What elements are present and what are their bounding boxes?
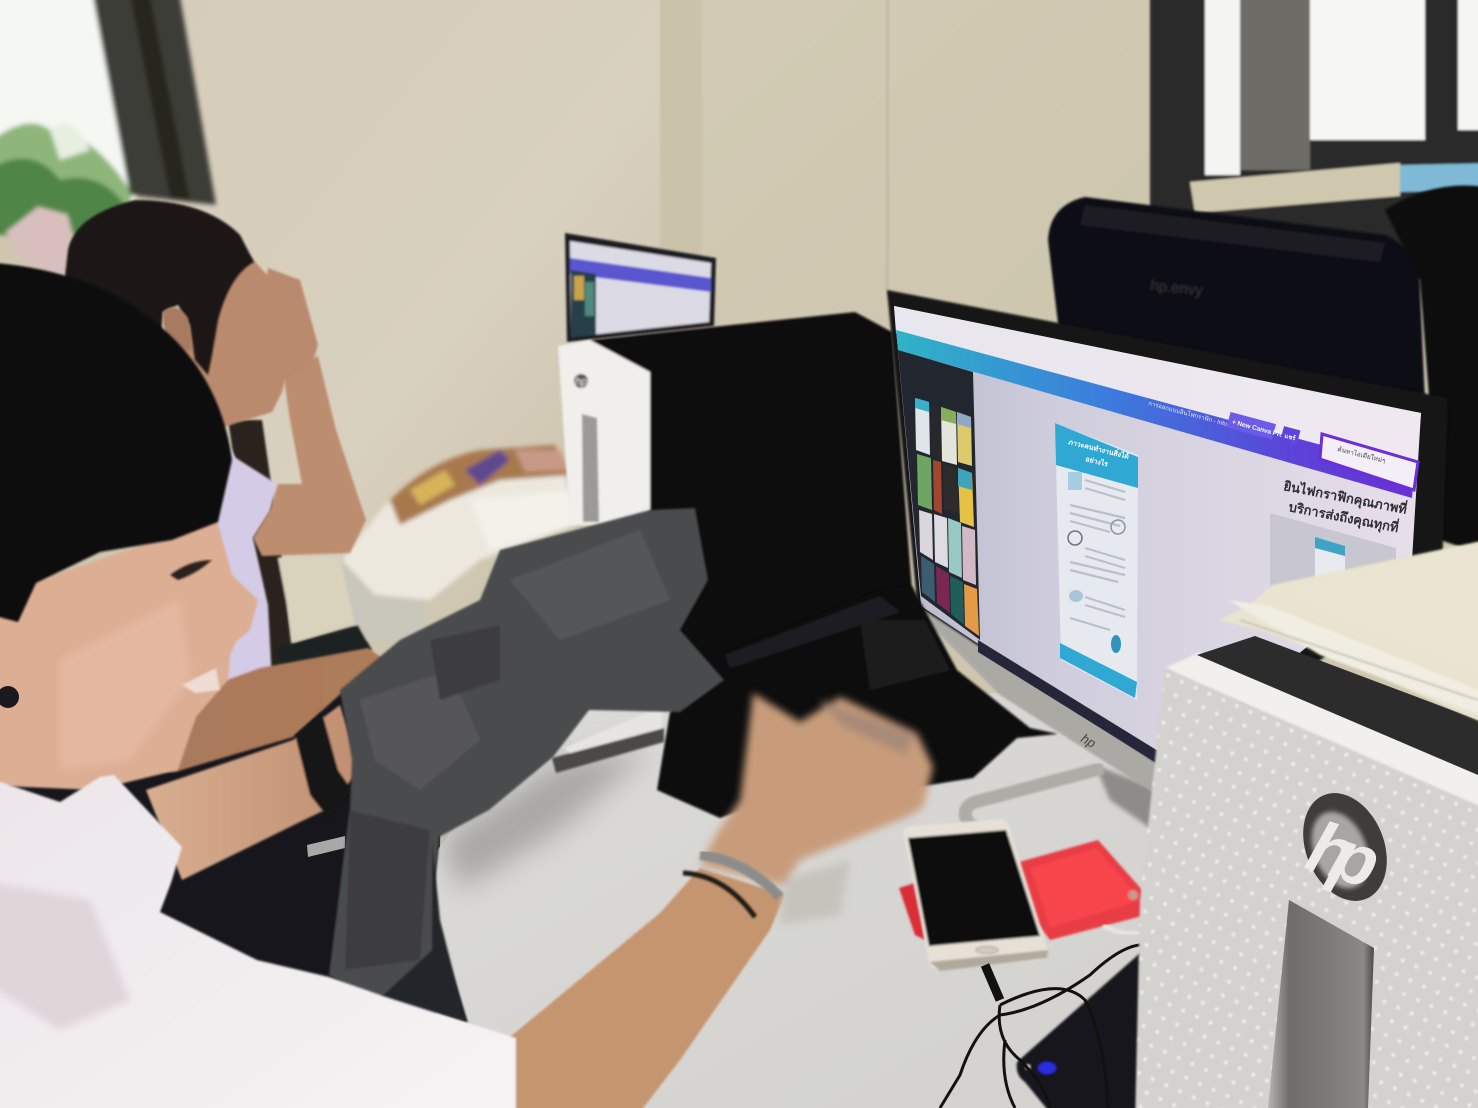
taskbar	[978, 640, 1163, 767]
side ad picture	[1270, 513, 1396, 600]
desk back edge	[552, 706, 664, 773]
back person: ear	[163, 307, 192, 352]
window: right with dark frame	[1150, 0, 1478, 260]
front student: shirt	[0, 775, 516, 1108]
notification box	[1320, 434, 1418, 490]
front student: earring	[0, 686, 19, 708]
page header	[1055, 423, 1138, 488]
page subheading: อย่างไร	[1085, 454, 1109, 469]
screen canvas	[894, 306, 1421, 766]
front student: smile	[182, 668, 220, 693]
front student: hair	[0, 262, 232, 622]
back person: hair	[60, 200, 254, 375]
page icons	[1068, 472, 1125, 653]
back person: arm	[253, 356, 366, 556]
hp badge: hp	[1298, 806, 1389, 904]
red phone case	[899, 840, 1151, 940]
background: left wall	[150, 0, 670, 640]
share button	[1280, 426, 1300, 446]
blue LED display	[1038, 1062, 1056, 1074]
power bank	[1017, 947, 1147, 1108]
page content lines	[1070, 480, 1125, 630]
shirt fold	[0, 880, 130, 1030]
black wristband	[295, 712, 352, 818]
white tower in foreground	[1135, 636, 1478, 1108]
front student's arm	[510, 868, 785, 1108]
black bag on desk	[657, 586, 1058, 818]
monitor stand neck shadow	[1095, 765, 1160, 835]
blurred waving hand	[700, 693, 933, 925]
smartphone	[903, 819, 1048, 971]
left tool strip and templates panel	[898, 350, 980, 640]
New Canva Pro button	[1226, 412, 1286, 442]
black cables	[940, 945, 1147, 1108]
hp badge	[1288, 780, 1402, 914]
tote bag	[342, 445, 575, 600]
tower front perforated panel	[1135, 668, 1478, 1108]
back person: shirt	[170, 440, 277, 700]
office chair	[1048, 186, 1478, 560]
white cable loop	[1103, 925, 1148, 934]
desk surface	[430, 680, 1165, 1108]
silver pen on lap	[307, 836, 345, 857]
back student's forearm	[140, 648, 385, 772]
back person: hair scrunchie	[5, 206, 76, 276]
side ad heading line 2: บริการส่งถึงคุณทุกที่	[1287, 497, 1400, 536]
person at back: lilac shirt and raised arm	[5, 200, 366, 700]
share button: แชร์	[1284, 432, 1297, 443]
front student's forearm with wristband	[146, 705, 360, 880]
template thumbnails	[915, 398, 979, 636]
infographic page being edited	[1055, 423, 1138, 700]
back monitor	[565, 233, 716, 342]
New Canva Pro button: + New Canva Pro	[1231, 419, 1284, 439]
silver slot	[1268, 900, 1374, 1108]
grey jacket	[329, 508, 724, 1022]
window: left with greenery	[0, 0, 216, 235]
back desk with keyboard	[228, 420, 430, 690]
tower top rim	[1165, 652, 1478, 825]
page footer	[1060, 643, 1137, 698]
browser and Canva screen	[894, 306, 1421, 767]
Canva header band	[896, 330, 1414, 498]
background: right wall	[660, 0, 1160, 420]
monitor chin	[918, 606, 1164, 798]
browser chrome	[894, 306, 1421, 474]
document title: การออกแบบอินโฟกราฟิก - Infographic	[1147, 399, 1247, 433]
page sheet	[1055, 423, 1138, 700]
notification text: ค้นหาไอเดียใหม่ๆ	[1337, 445, 1386, 465]
desk shadow under jacket	[440, 750, 650, 890]
office chair: hp.envy	[1150, 277, 1204, 300]
back person: face and hand	[165, 256, 318, 430]
stack of paper	[1218, 537, 1478, 730]
main monitor	[887, 290, 1448, 858]
tower dark top	[1197, 636, 1478, 775]
front student: face	[0, 520, 258, 790]
black desktop tower with white front	[558, 312, 912, 690]
front student: eye	[170, 560, 212, 580]
background: dark area under the desks	[0, 680, 440, 1108]
side ad heading line 1: ยินไฟกราฟิกคุณภาพที่	[1282, 476, 1409, 518]
hp mark on chin: hp	[1078, 731, 1099, 751]
dark trousers of front student	[120, 700, 468, 1023]
page heading: ภาวะคนทำงานสิ่งได้	[1068, 436, 1131, 461]
monitor stand	[965, 768, 1103, 858]
monitor bezel	[887, 290, 1448, 775]
bracelets on wrist	[683, 855, 780, 917]
small hp logo: hp	[575, 376, 587, 388]
front student in white shirt	[0, 262, 516, 1108]
